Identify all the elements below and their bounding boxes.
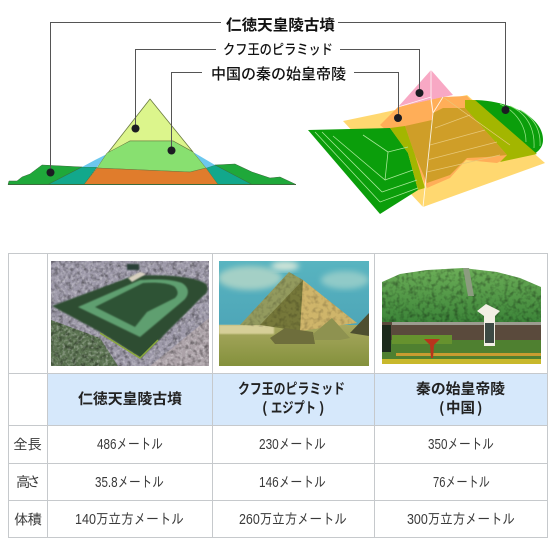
Khufu pyramid cross-section bbox=[107, 99, 193, 154]
row labels bbox=[13, 438, 42, 528]
overlap: kofun body and pyramid bbox=[405, 108, 507, 183]
column header: Khufu: ) bbox=[319, 397, 324, 418]
column header: Khufu: ( bbox=[262, 397, 267, 418]
column header: Nintoku: 仁徳天皇陵古墳 bbox=[78, 388, 183, 409]
column header: Qin: ( bbox=[439, 397, 444, 418]
ground line bbox=[8, 184, 296, 186]
column header: Qin: 中国 bbox=[446, 397, 475, 418]
photo: Qin mausoleum bbox=[382, 268, 541, 364]
column header: Qin: 秦の始皇帝陵 bbox=[416, 378, 506, 399]
label: Qin: 中国の秦の始皇帝陵 bbox=[211, 63, 346, 84]
column header: Khufu: クフ王のピラミッド bbox=[238, 378, 345, 399]
Qin mausoleum cross-section bbox=[97, 141, 206, 172]
data: height bbox=[95, 475, 490, 491]
header row background bbox=[48, 374, 547, 425]
data: volume bbox=[75, 512, 515, 528]
Qin mausoleum base bbox=[343, 95, 545, 207]
photo: Giza pyramids bbox=[218, 261, 369, 366]
data: total length: 350メートル bbox=[428, 437, 494, 453]
underground base bbox=[84, 168, 218, 184]
data: height: 146メートル bbox=[259, 475, 326, 491]
table grid bbox=[8, 254, 548, 538]
overlap: pyramid on base bbox=[380, 96, 510, 188]
leader line: Nintoku bbox=[50, 22, 506, 172]
data: total length: 486メートル bbox=[97, 437, 163, 453]
data: volume: 300万立方メートル bbox=[407, 512, 515, 528]
kofun round mound bbox=[470, 100, 543, 162]
leader line: Khufu bbox=[136, 50, 420, 128]
Khufu pyramid top bbox=[398, 70, 453, 107]
label: Nintoku: 仁徳天皇陵古墳 bbox=[226, 14, 335, 35]
data: volume: 140万立方メートル bbox=[75, 512, 184, 528]
column header: Qin: ) bbox=[477, 397, 482, 418]
marker dots bbox=[46, 89, 510, 176]
kofun cross-section bbox=[8, 152, 296, 184]
data: height: 35.8メートル bbox=[95, 475, 164, 491]
data: volume: 260万立方メートル bbox=[239, 512, 347, 528]
comparison table bbox=[8, 254, 548, 538]
overlap: kofun on base bbox=[465, 100, 537, 162]
label: Khufu: クフ王のピラミッド bbox=[223, 40, 333, 60]
row labels: 全長 bbox=[13, 438, 42, 454]
column header: Qin bbox=[416, 378, 506, 418]
row labels: 体積 bbox=[14, 512, 42, 528]
row labels: 高さ bbox=[16, 475, 41, 491]
3D overlay diagram bbox=[308, 70, 545, 214]
kofun front bbox=[308, 126, 425, 214]
data: total length: 230メートル bbox=[259, 437, 326, 453]
column header: Khufu: エジプト bbox=[271, 397, 316, 418]
column header: Khufu bbox=[238, 378, 345, 418]
photo: Nintoku tomb aerial bbox=[51, 261, 209, 366]
data: height: 76メートル bbox=[433, 475, 490, 491]
leader line: Qin bbox=[172, 72, 398, 150]
data: total length bbox=[97, 437, 494, 453]
pyramid ridge lines bbox=[398, 70, 443, 207]
cross-section diagram bbox=[8, 99, 296, 184]
